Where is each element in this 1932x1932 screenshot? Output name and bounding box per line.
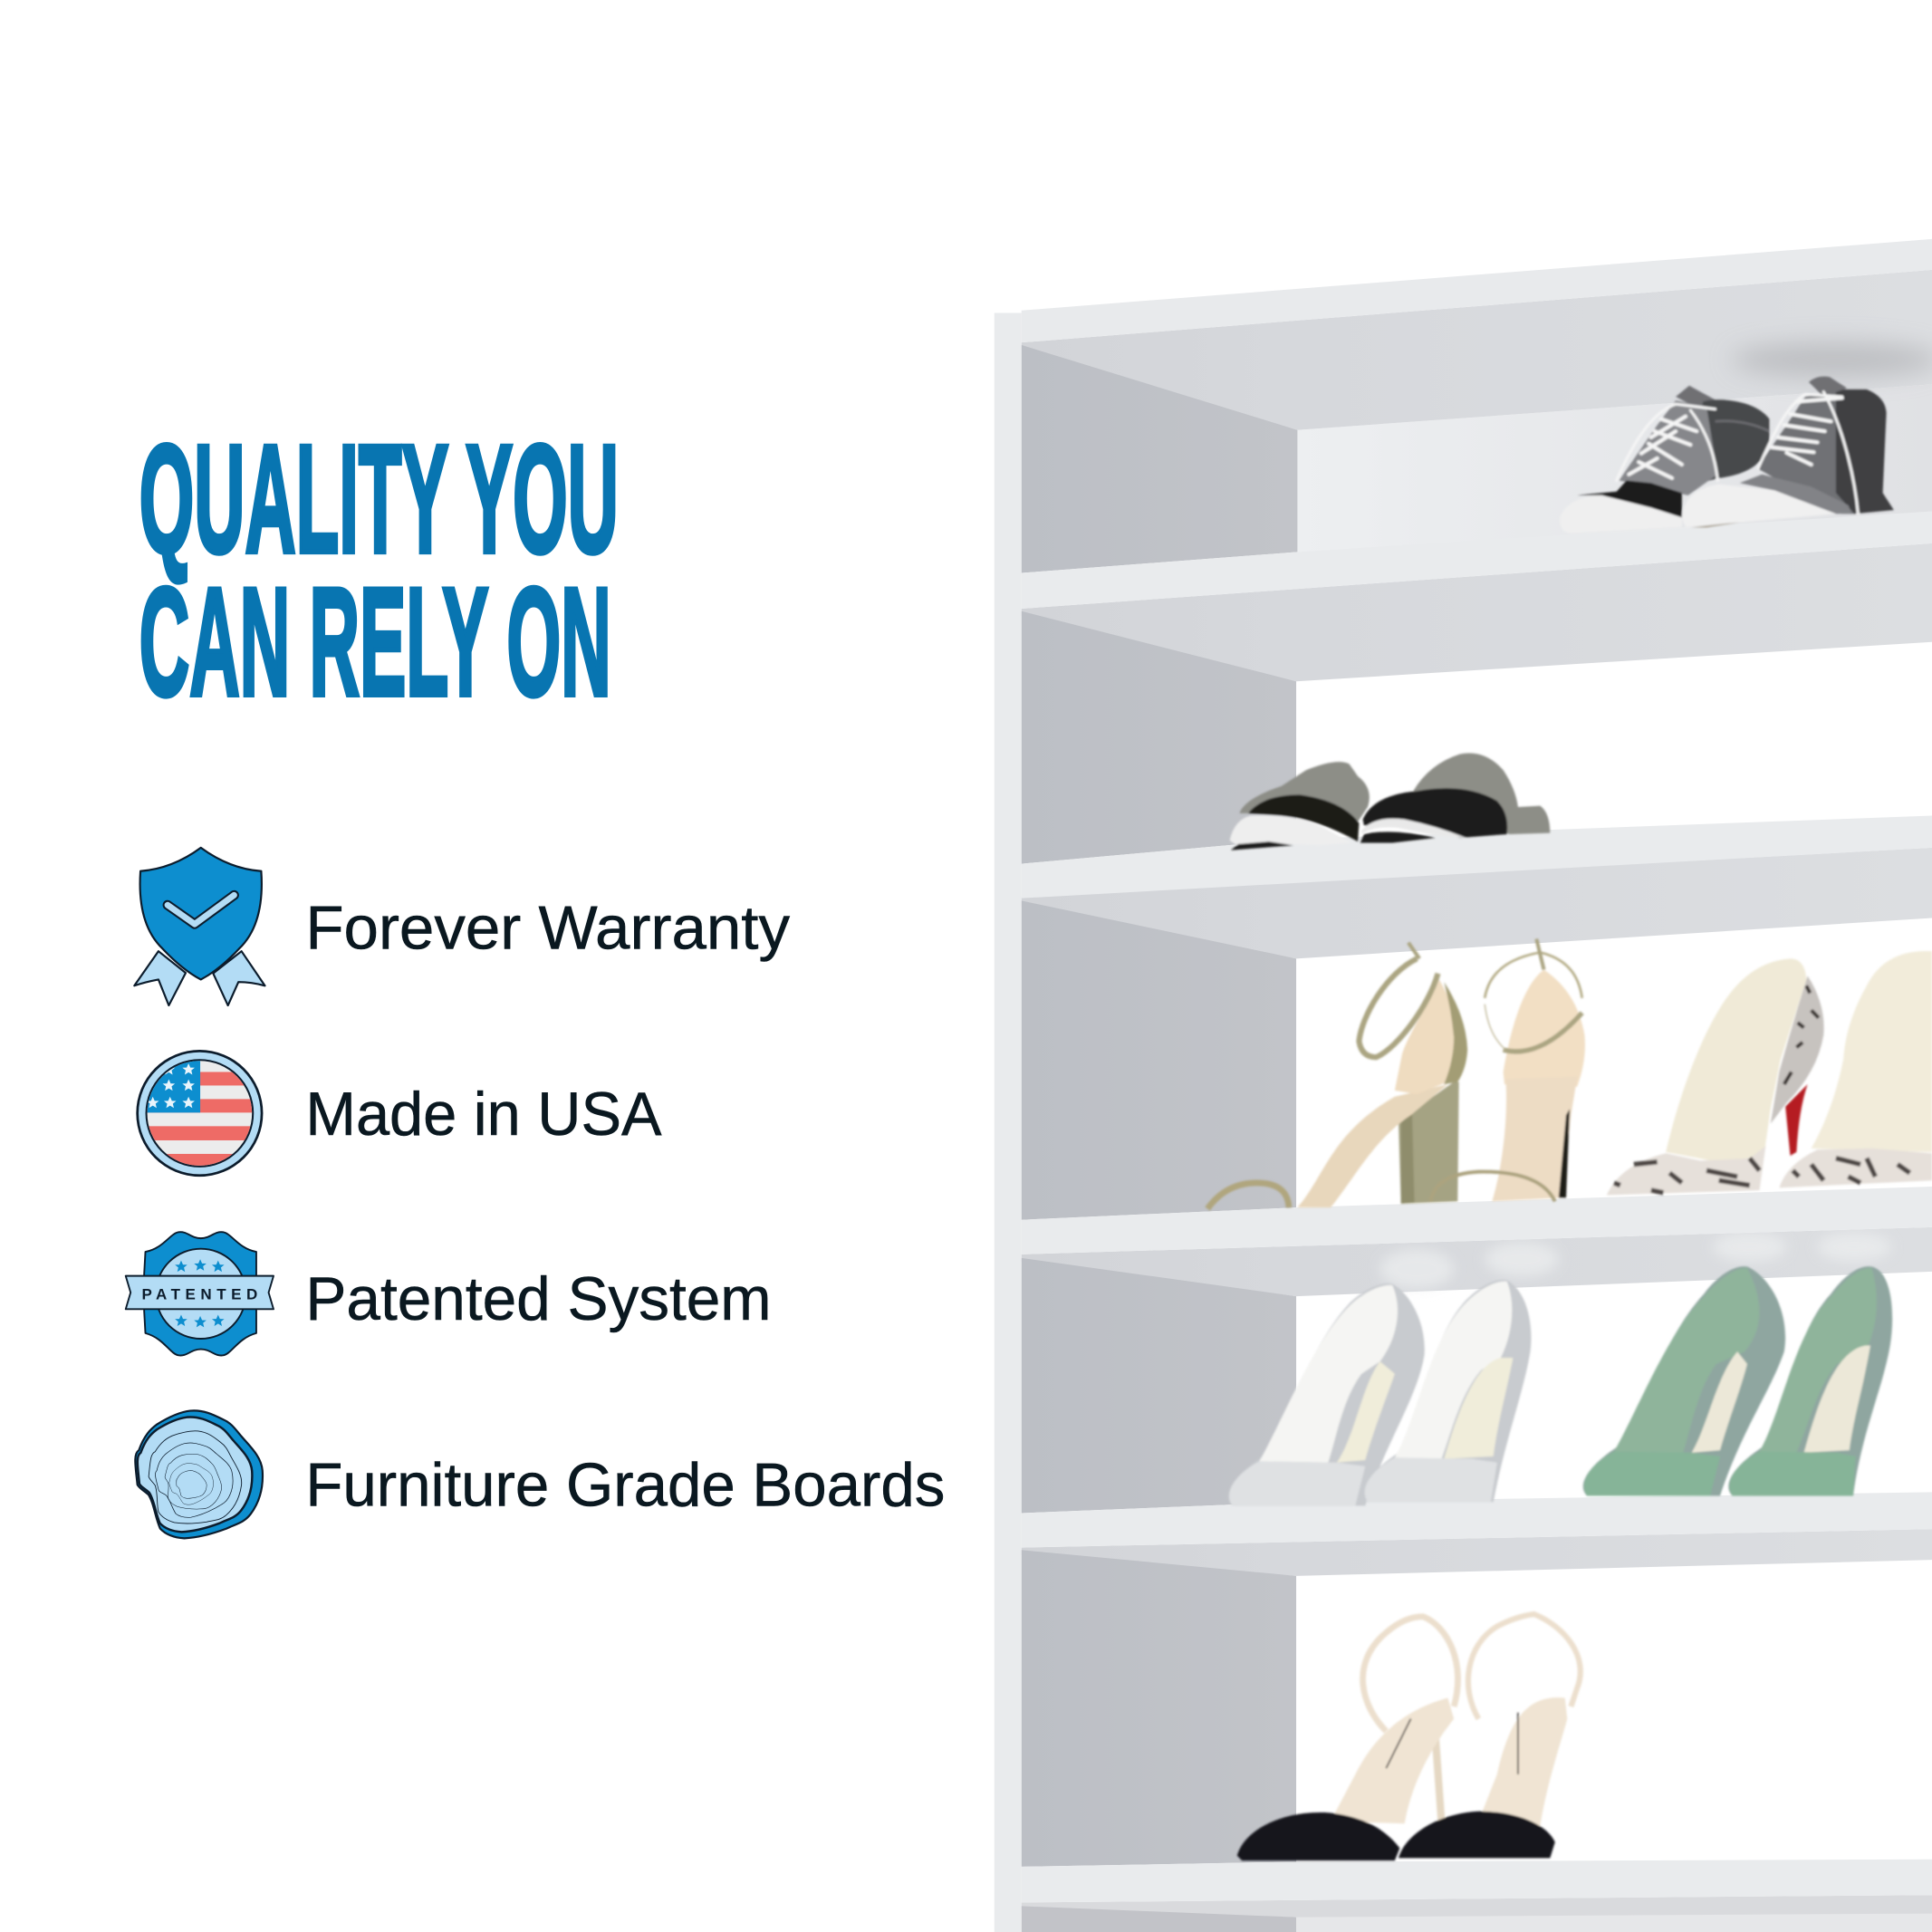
shoes: grey pumps [1228, 1280, 1531, 1505]
icon: wood rings [135, 1410, 263, 1538]
shoes: dark sneakers [1230, 753, 1550, 851]
side panel 1 [1022, 345, 1297, 573]
heading [139, 413, 619, 728]
side panel 4 [1022, 1258, 1296, 1513]
text: Furniture Grade Boards: Furniture Grade Boards [305, 1450, 945, 1519]
compartment 1 back wall [1297, 384, 1932, 553]
shelf 1 front [1022, 512, 1932, 609]
shoes: slingback heels [1237, 1614, 1581, 1860]
side panel 5 [1022, 1550, 1296, 1867]
infographic canvas: CAN RELY ON [139, 556, 611, 728]
shelf 5 underside [1022, 1895, 1932, 1918]
icon: patented badge: PATENTED [141, 1285, 257, 1302]
bottom back wall [1296, 1910, 1932, 1932]
top board underside [1022, 270, 1932, 430]
shelf 3 underside [1022, 1227, 1932, 1296]
infographic canvas: QUALITY YOU [139, 413, 619, 585]
bottom side panel [1022, 1906, 1296, 1932]
shoes: grey sneakers [1560, 377, 1894, 533]
shelf 4 underside [1022, 1529, 1932, 1576]
shelf 3 front [1022, 1187, 1932, 1254]
text: Forever Warranty: Forever Warranty [305, 893, 790, 962]
icon: patented badge [126, 1232, 274, 1356]
shelf 4 front [1022, 1492, 1932, 1548]
shoes: green pumps [1583, 1266, 1892, 1495]
side panel 2 [1022, 611, 1296, 864]
shoes: beige sandals [1207, 939, 1585, 1208]
left post [995, 313, 1022, 1932]
shelf 2 front [1022, 816, 1932, 899]
shelf 2 underside [1022, 848, 1932, 958]
icon: shield warranty [134, 848, 264, 1005]
shoe cabinet [995, 239, 1932, 1932]
icon: USA flag badge [136, 1050, 263, 1177]
text: Made in USA: Made in USA [305, 1080, 662, 1149]
text: Patented System: Patented System [305, 1264, 772, 1333]
shadow above sneakers [1731, 342, 1932, 377]
side panel 3 [1022, 900, 1296, 1220]
shelf 3 reflections [1380, 1232, 1891, 1289]
shoes: snakeskin pumps [1607, 951, 1932, 1196]
feature list [126, 848, 945, 1538]
shelf 5 front [1022, 1860, 1932, 1902]
shelf 1 underside [1022, 543, 1932, 681]
top board front [1022, 239, 1932, 342]
